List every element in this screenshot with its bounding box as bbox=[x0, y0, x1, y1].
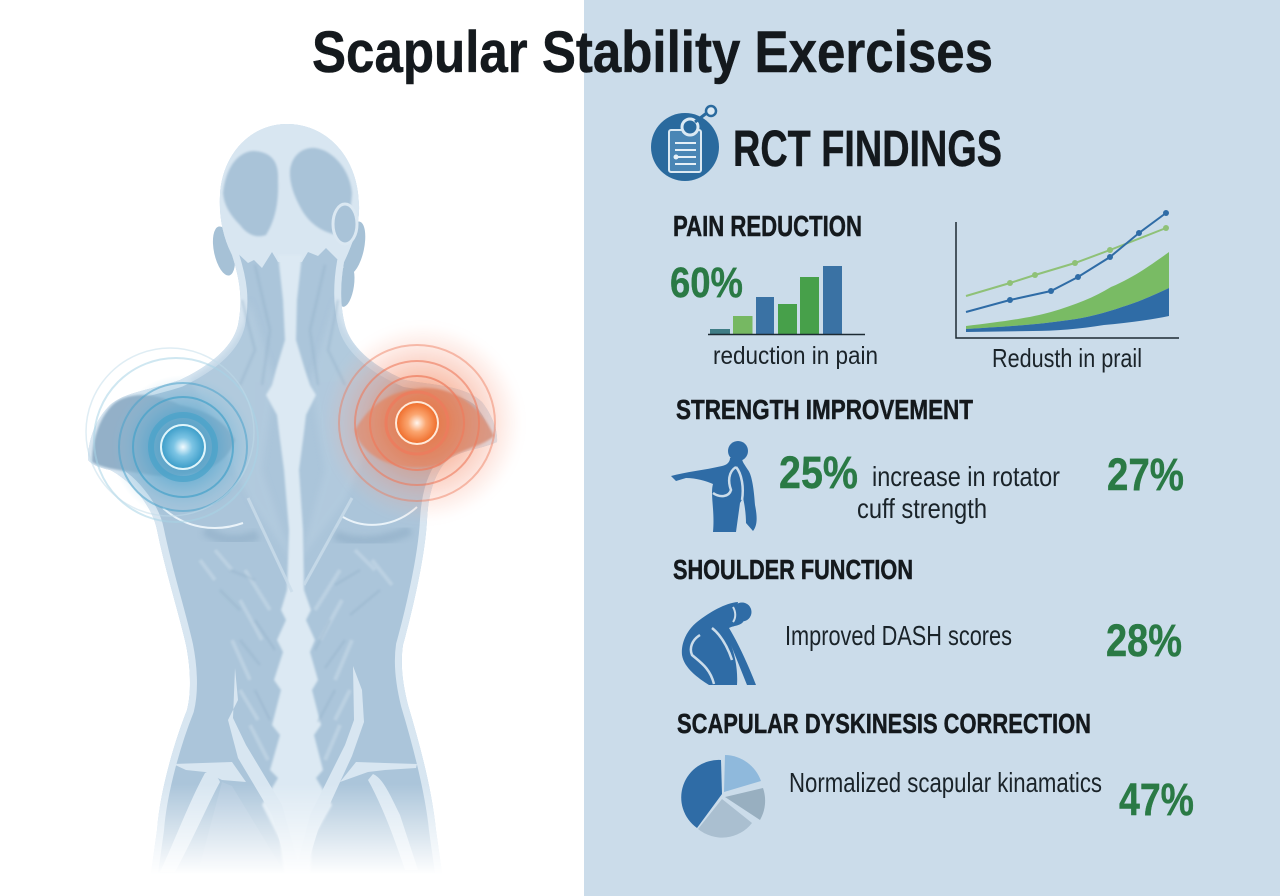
text: increase in rotator cuff strength bbox=[857, 461, 1060, 524]
icon: bent figure bbox=[682, 602, 756, 685]
bar chart bbox=[708, 266, 865, 334]
caption: reduction in pain: reduction in pain bbox=[713, 342, 878, 370]
icon: clipboard findings badge bbox=[651, 106, 719, 181]
title: Scapular Stability Exercises bbox=[312, 20, 993, 85]
head lobes bbox=[223, 148, 352, 236]
stat: 47%: 47% bbox=[1119, 774, 1194, 825]
silhouette bbox=[80, 115, 505, 885]
text: improved DASH scores: Improved DASH scores bbox=[785, 620, 1012, 651]
stat: 27%: 27% bbox=[1107, 449, 1184, 500]
heading: shoulder function: SHOULDER FUNCTION bbox=[673, 554, 913, 585]
spine bbox=[262, 255, 332, 880]
text: increase in rotator cuff strength: cuff strength bbox=[857, 493, 987, 524]
ears bbox=[209, 220, 369, 308]
text: increase in rotator cuff strength: increase in rotator bbox=[872, 461, 1060, 492]
caption: chart label: Redusth in prail bbox=[992, 343, 1142, 373]
flank and pelvis light bands bbox=[228, 669, 280, 841]
icon: figure with raised arm bbox=[671, 441, 757, 532]
section: pain reduction bbox=[670, 210, 1179, 373]
illustration: back anatomy figure bbox=[80, 115, 523, 885]
muscle fibre texture bbox=[200, 550, 392, 760]
orange shoulder target bbox=[323, 323, 523, 523]
pie chart bbox=[681, 755, 765, 838]
heading: strength improvement: STRENGTH IMPROVEMENT bbox=[676, 394, 973, 425]
section: shoulder function bbox=[673, 554, 1182, 685]
deltoids bbox=[92, 395, 235, 476]
blue shoulder target bbox=[86, 348, 258, 522]
section: scapular dyskinesis correction bbox=[677, 708, 1194, 838]
section: strength improvement bbox=[671, 394, 1184, 532]
panel: right findings background bbox=[584, 0, 1280, 896]
ear ring bbox=[333, 204, 357, 244]
latissimus light edges bbox=[248, 498, 292, 592]
line and area chart bbox=[956, 210, 1179, 338]
text: normalized scapular kinematics: Normalized scapular kinamatics bbox=[789, 767, 1102, 798]
body silhouette and muscles bbox=[80, 115, 505, 885]
head cap bbox=[227, 131, 352, 268]
heading: pain reduction: PAIN REDUCTION bbox=[673, 211, 862, 243]
scapula outlines bbox=[163, 508, 243, 528]
stat: 28%: 28% bbox=[1106, 615, 1182, 666]
stat: 60%: 60% bbox=[670, 259, 743, 307]
heading: RCT findings: RCT FINDINGS bbox=[733, 120, 1002, 177]
trapezius shading bbox=[191, 318, 246, 382]
stat: 25%: 25% bbox=[779, 447, 858, 498]
heading: scapular dyskinesis correction: SCAPULAR DYSKINESIS CORRECTION bbox=[677, 708, 1091, 739]
